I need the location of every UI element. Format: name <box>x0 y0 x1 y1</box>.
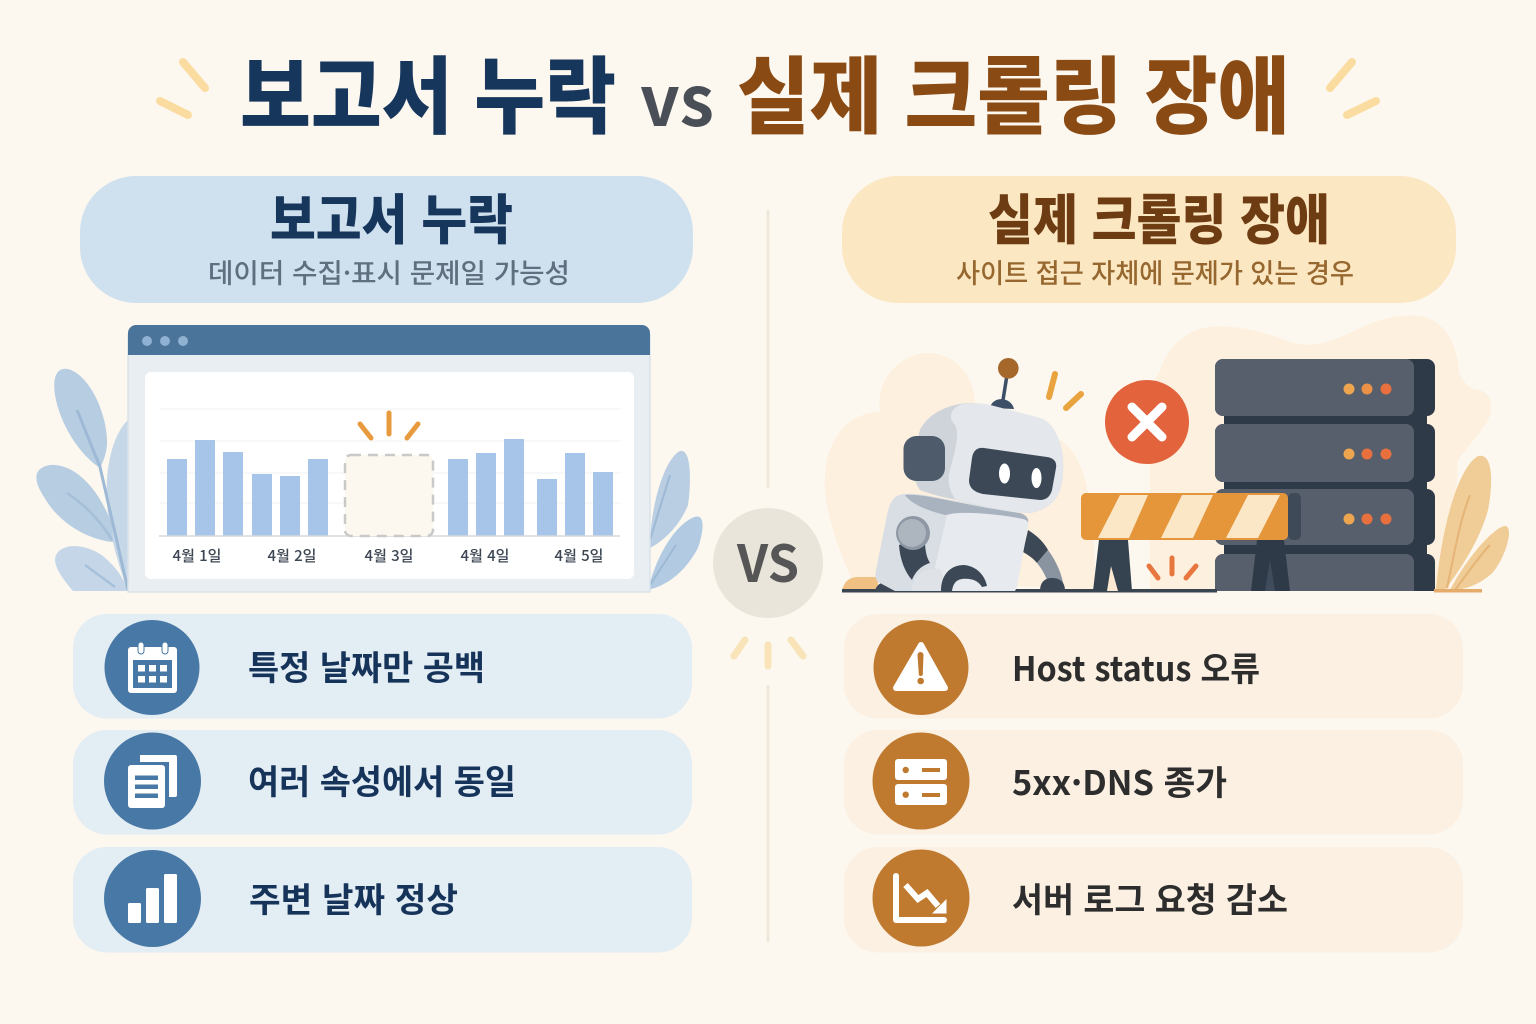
date labels: 4월 1일 <box>173 545 221 566</box>
server rack <box>1215 359 1435 591</box>
row: 5xx DNS: 5xx·DNS 종가 <box>1012 756 1227 805</box>
browser window with bar chart <box>128 325 650 592</box>
row: specific date blank <box>73 614 692 718</box>
icon: falling chart <box>896 876 946 920</box>
title accent sparks <box>160 62 1376 115</box>
robot alert sparks <box>1049 374 1081 408</box>
panel header: report omission: 보고서 누락 <box>270 176 513 255</box>
illustration background blobs <box>825 316 1491 590</box>
icon: documents <box>128 755 177 808</box>
barrier <box>1081 493 1301 591</box>
row: surrounding dates normal: 주변 날짜 정상 <box>249 873 458 922</box>
illustration: leaves right <box>648 451 703 590</box>
row: specific date blank: 특정 날짜만 공백 <box>248 641 485 690</box>
ground line <box>842 577 1482 592</box>
robot ear <box>904 436 945 481</box>
robot foot <box>875 582 900 591</box>
date labels: 4월 5일 <box>555 545 603 566</box>
illustration: leaves left <box>36 369 128 591</box>
error x badge <box>1105 380 1189 464</box>
panel header: actual crawl failure: 실제 크롤링 장애 <box>988 176 1330 255</box>
vs badge: VS <box>736 523 799 597</box>
robot body <box>875 494 1028 591</box>
panel header: report omission: 데이터 수집·표시 문제일 가능성 <box>208 252 570 291</box>
vs sparks <box>734 640 803 666</box>
illustration: right plant <box>1436 456 1509 590</box>
robot hand <box>912 569 950 591</box>
date labels: 4월 4일 <box>461 545 509 566</box>
icon: bar chart <box>128 874 177 923</box>
panel header: report omission <box>80 176 693 303</box>
title <box>240 30 1290 152</box>
date labels: 4월 3일 <box>365 545 413 566</box>
row: same across properties <box>73 730 692 834</box>
vs badge <box>713 508 823 618</box>
robot right arm <box>1023 530 1048 563</box>
bars <box>167 439 613 536</box>
date labels <box>173 545 603 566</box>
row: same across properties: 여러 속성에서 동일 <box>248 755 516 804</box>
title: vs <box>640 46 714 147</box>
robot left arm <box>899 538 930 580</box>
panel header: actual crawl failure <box>842 176 1456 303</box>
title: 실제 크롤링 장애 <box>737 30 1290 152</box>
panel header: actual crawl failure: 사이트 접근 자체에 문제가 있는 경우 <box>956 252 1354 291</box>
robot shoulder <box>896 516 930 550</box>
barrier sparks <box>1149 558 1196 578</box>
date labels: 4월 2일 <box>268 545 316 566</box>
icon: calendar <box>128 642 177 693</box>
row: host status error <box>844 614 1463 718</box>
row: 5xx DNS <box>844 730 1463 834</box>
icon: warning triangle <box>896 645 945 688</box>
server status lights <box>1344 384 1392 524</box>
robot antenna <box>1003 375 1007 400</box>
row: server log requests decrease <box>844 847 1463 952</box>
robot head <box>914 403 1063 513</box>
robot eyes <box>999 464 1010 484</box>
row: server log requests decrease: 서버 로그 요청 감소 <box>1012 873 1288 922</box>
title: 보고서 누락 <box>240 30 616 152</box>
row: surrounding dates normal <box>73 847 692 952</box>
icon: server <box>895 759 947 805</box>
missing day placeholder <box>345 455 433 536</box>
row: host status error: Host status 오류 <box>1012 642 1260 691</box>
center divider <box>766 210 770 942</box>
alert sparks <box>360 413 418 438</box>
robot visor <box>969 448 1056 500</box>
robot <box>875 358 1065 591</box>
